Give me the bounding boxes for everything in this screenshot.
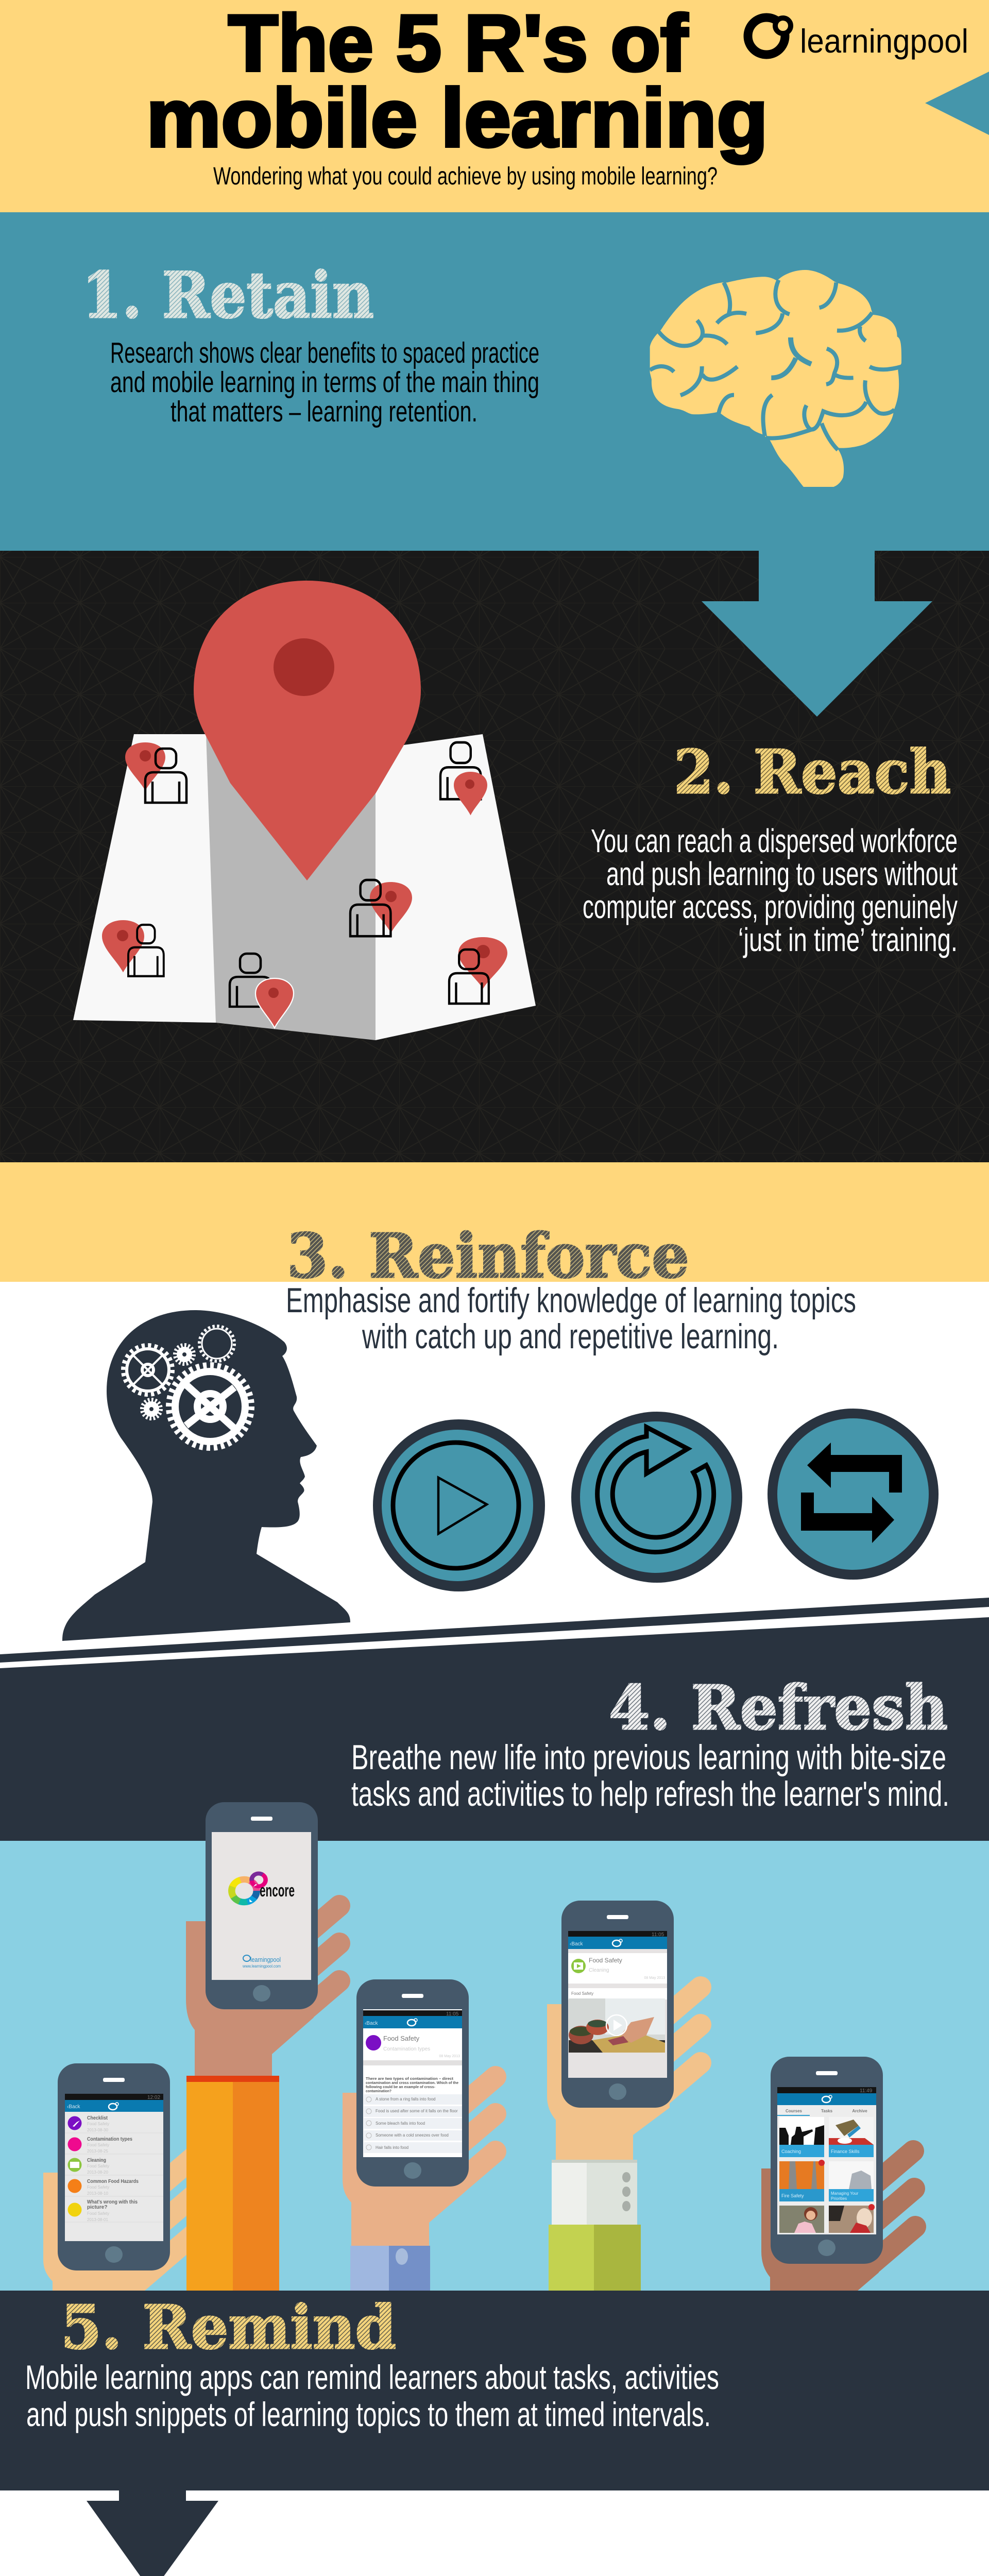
illustration: hand with quiz phone: ‹Back [365,2021,379,2026]
icon: repeat button [768,1409,939,1580]
illustration: hand with encore splash phone [186,1802,339,2291]
tile: coaching [779,2117,824,2157]
sleeve: white cuff and green [549,2160,641,2291]
illustration: hand with list phone: Cleaning [87,2158,106,2163]
text block: remind: and push snippets of learning topics to them at timed intervals. [26,2395,711,2433]
panel: retain [0,212,989,551]
illustration: hand with list phone: 2013-08-20 [87,2170,108,2175]
illustration: hand with quiz phone: following could be an example of cross- [366,2086,436,2089]
tile: managing your priorities: Priorities [831,2196,847,2201]
illustration: hand with quiz phone: There are two types of contamination – direct [366,2077,454,2081]
illustration: hand with list phone: What's wrong with this [87,2199,138,2205]
illustration: hand with courses phone: Tasks [821,2109,833,2113]
logo: learningpool: learningpool [800,22,968,60]
illustration: hand with quiz phone: 11:05 [446,2011,459,2017]
text block: reinforce: with catch up and repetitive learning. [362,1317,779,1356]
illustration: hand with list phone: Contamination types [87,2137,132,2142]
title: mobile learning [146,72,768,164]
text block: retain: Research shows clear benefits to spaced practice [110,336,539,369]
panel: refresh [0,1598,989,2291]
text block: refresh [351,1738,949,1814]
text block: remind [25,2358,719,2433]
tile: first aid [829,2204,875,2233]
heading: 4. Refresh: 4. Refresh [609,1672,948,1743]
illustration: hand with list phone: 2013-08-25 [87,2149,108,2154]
subtitle: Wondering what you could achieve by using mobile learning? [213,163,718,190]
illustration: hand with encore splash phone: www.learningpool.com [242,1964,281,1969]
illustration: hand with list phone: picture? [87,2205,107,2210]
icon: pin and person C [350,880,412,936]
illustration: hand with video phone: 11:05 [652,1932,664,1938]
illustration: hand with list phone: Food Safety [87,2211,109,2216]
tile: finance skills [829,2117,874,2157]
illustration: hand with video phone: Food Safety [589,1957,622,1964]
logo: learningpool [748,18,968,60]
title: The 5 R's of [228,0,688,88]
illustration: hand with list phone [43,2063,197,2291]
text block: reach [583,822,958,958]
panel: remind [0,2291,989,2576]
illustration: hand with video phone: Food Safety [571,1991,593,1996]
illustration: hand with courses phone [761,2057,915,2291]
icon: pin and person A [125,742,186,803]
illustration: hand with video phone: 08 May 2013 [644,1976,665,1980]
illustration: hand with list phone: 12:02 [147,2095,160,2100]
illustration: hand with video phone: ‹Back [570,1941,584,1947]
illustration: hand with list phone: ‹Back [67,2104,81,2110]
heading: 2. Reach: 2. Reach [674,737,951,807]
illustration: hand with list phone: Checklist [87,2115,108,2121]
tile: fire safety: Fire Safety [781,2193,804,2198]
arrow: teal down [702,551,932,717]
panel: reinforce [0,1162,989,1673]
tile: managing your priorities [829,2161,874,2201]
map illustration [73,581,536,1040]
panel: reach [0,551,989,1162]
icon: pin and person F [449,937,507,1004]
illustration: hand with quiz phone: Hair falls into food [376,2145,408,2150]
sleeve: blue cuff [350,2246,430,2291]
illustration: hand with courses phone: 11:49 [860,2088,873,2094]
illustration: hand with encore splash phone: encore [260,1881,295,1901]
icon: pin and person D [102,920,164,976]
illustration: hand with quiz phone: Food is used after some of it falls on the floor [376,2109,458,2113]
photo: chef chopping [569,1998,665,2053]
illustration: hand with quiz phone [343,1979,496,2291]
text block: retain: and mobile learning in terms of the main thing [110,366,539,399]
sleeve: orange [186,2076,279,2291]
heading: 1. Retain: 1. Retain [82,259,374,333]
text block: retain [110,336,539,428]
illustration: hand with quiz phone: Food Safety [383,2035,420,2042]
tile: woman at chalkboard [779,2206,824,2233]
text block: retain: that matters – learning retention. [170,395,478,428]
illustration: hand with quiz phone: contamination and cross contamination. Which of the [366,2081,458,2085]
illustration: hand with list phone: Common Food Hazards [87,2179,139,2184]
heading: 5. Remind: 5. Remind [61,2293,396,2363]
icon: large map pin [194,581,421,880]
icon: head with gears [62,1310,350,1641]
illustration: hand with list phone: Food Safety [87,2143,109,2147]
illustration: hand with courses phone: Archive [852,2109,867,2113]
tile: coaching: Coaching [781,2149,801,2154]
icon: pin and person B [440,742,487,815]
illustration: hand with quiz phone: Contamination types [383,2046,430,2052]
illustration: hand with list phone: 2013-08-10 [87,2191,108,2196]
illustration: hand with quiz phone: Some bleach falls into food [376,2121,425,2126]
illustration: hand with list phone: 2013-08-01 [87,2217,108,2222]
illustration: hand with list phone: Food Safety [87,2122,109,2126]
icon: play button [373,1419,545,1591]
illustration: hand with quiz phone: Someone with a cold sneezes over food [376,2133,449,2138]
illustration: hand with list phone: Food Safety [87,2164,109,2168]
icon: brain [650,270,901,487]
arrow: navy down [87,2490,218,2576]
text block: reinforce [286,1281,856,1356]
illustration: hand with encore splash phone: learningpool [250,1956,281,1963]
illustration: hand with quiz phone: A stone from a ring falls into food [376,2097,436,2102]
arrow: teal notch [925,72,989,135]
illustration: hand with quiz phone: 08 May 2013 [439,2055,460,2058]
icon: pin and person E [230,954,294,1028]
heading: 3. Reinforce: 3. Reinforce [287,1220,689,1292]
icon: replay button [571,1412,742,1583]
title [146,0,768,164]
illustration: hand with courses phone: Courses [786,2109,803,2113]
illustration: hand with quiz phone: contamination? [366,2090,391,2093]
tile: fire safety [779,2160,825,2201]
text block: remind: Mobile learning apps can remind learners about tasks, activities [25,2358,719,2396]
header panel [0,0,989,212]
illustration: hand with video phone: Cleaning [589,1968,609,1973]
illustration: hand with list phone: Food Safety [87,2185,109,2190]
illustration: hand with list phone: 2013-08-30 [87,2128,108,2132]
illustration: hand with video phone [547,1901,701,2291]
tile: managing your priorities: Managing Your [831,2191,859,2196]
tile: finance skills: Finance Skills [831,2149,860,2154]
